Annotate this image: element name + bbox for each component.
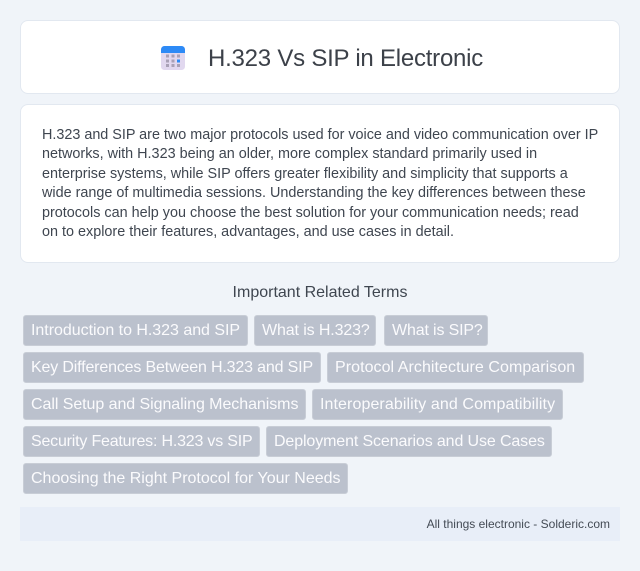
header panel — [20, 20, 620, 94]
description text: networks, with H.323 being an older, more complex standard primarily used in — [42, 146, 537, 162]
related terms heading: Important Related Terms — [233, 284, 407, 301]
tag: Choosing the Right Protocol for Your Needs — [31, 470, 341, 487]
related terms tags — [23, 315, 584, 494]
tag: What is SIP? — [392, 322, 483, 339]
tag — [23, 315, 248, 346]
tag: Deployment Scenarios and Use Cases — [274, 433, 545, 450]
title: H.323 Vs SIP in Electronic — [208, 45, 483, 72]
icon: calendar — [161, 46, 185, 70]
footer text: All things electronic - Solderic.com — [427, 517, 610, 531]
tag — [312, 389, 563, 420]
description text: protocols can help you choose the best solution for your communication needs; read — [42, 205, 579, 221]
tag — [23, 463, 348, 494]
tag: What is H.323? — [262, 322, 370, 339]
footer bar — [20, 507, 620, 541]
tag: Interoperability and Compatibility — [320, 396, 555, 413]
tag — [23, 426, 260, 457]
tag — [23, 352, 321, 383]
tag — [266, 426, 552, 457]
tag: Security Features: H.323 vs SIP — [31, 433, 252, 450]
tag: Key Differences Between H.323 and SIP — [31, 359, 313, 376]
tag — [254, 315, 376, 346]
tag — [327, 352, 584, 383]
tag: Introduction to H.323 and SIP — [31, 322, 240, 339]
description text: enterprise systems, while SIP offers greater flexibility and simplicity that supports a — [42, 166, 568, 182]
tag — [23, 389, 306, 420]
tag: Protocol Architecture Comparison — [335, 359, 575, 376]
description text — [42, 127, 598, 240]
tag — [384, 315, 488, 346]
description text: wide range of multimedia sessions. Understanding the key differences between these — [42, 185, 586, 201]
description text: on to explore their features, advantages, and use cases in detail. — [42, 224, 454, 240]
description panel — [20, 104, 620, 263]
description text: H.323 and SIP are two major protocols used for voice and video communication over IP — [42, 127, 598, 143]
tag: Call Setup and Signaling Mechanisms — [31, 396, 298, 413]
